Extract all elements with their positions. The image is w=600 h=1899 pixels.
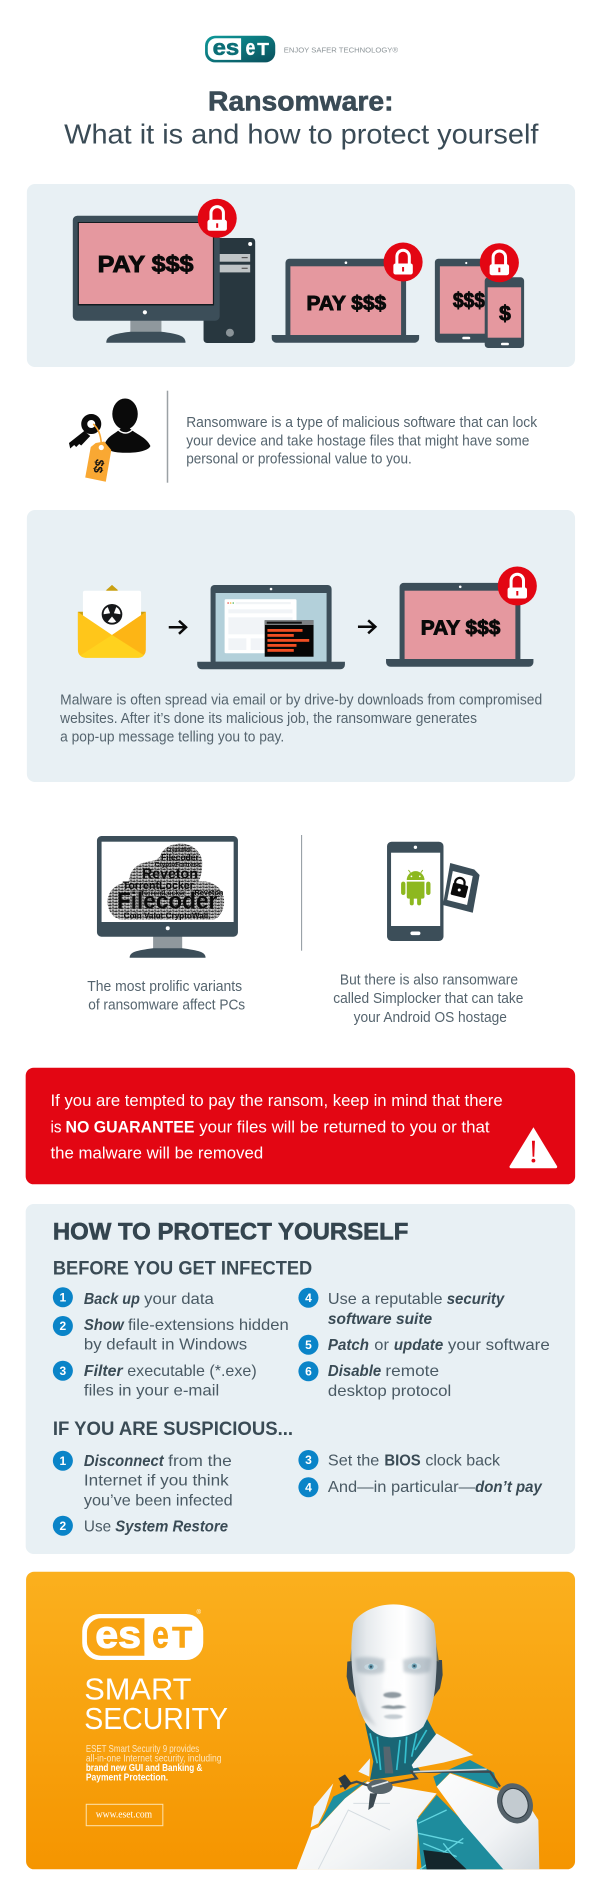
icon: desktop tower xyxy=(204,238,255,343)
suspicious step 4: 4 xyxy=(305,1481,312,1494)
ESET white logo: e xyxy=(152,1615,169,1657)
ESET white logo: T xyxy=(172,1622,193,1655)
panel: red warning callout xyxy=(26,1068,575,1184)
step 6: desktop protocol xyxy=(328,1382,451,1400)
panel: how to protect yourself xyxy=(26,1204,575,1554)
ESET white logo: es xyxy=(95,1615,141,1657)
panel: red warning callout: the malware will be removed xyxy=(51,1144,263,1163)
locked SD card xyxy=(443,863,480,913)
icon: warning triangle xyxy=(509,1127,557,1168)
panel: locked devices xyxy=(27,184,575,367)
icon: laptop with ransom screen: PAY $$$ xyxy=(421,618,500,640)
step 1: Back up xyxy=(84,1290,140,1308)
suspicious step 4: And—in particular— xyxy=(328,1478,476,1496)
caption: Simplocker xyxy=(333,973,523,1026)
divider xyxy=(167,391,168,483)
arrow xyxy=(169,621,186,634)
suspicious step 1 xyxy=(53,1451,233,1509)
step 2: by default in Windows xyxy=(84,1336,247,1354)
android logo xyxy=(401,870,430,905)
word cloud: CryptoFortress xyxy=(155,863,201,869)
ESET logo with tagline: ENJOY SAFER TECHNOLOGY® xyxy=(284,46,399,54)
heading: HOW TO PROTECT YOURSELF xyxy=(53,1218,408,1245)
step 5: 5 xyxy=(305,1338,312,1352)
price tag: $$ xyxy=(90,458,107,474)
divider xyxy=(301,835,302,951)
step 4: 4 xyxy=(305,1291,312,1305)
ESET logo with tagline: e xyxy=(246,35,255,60)
panel: ESET Smart Security promo xyxy=(26,1572,575,1869)
step 3: 3 xyxy=(60,1364,67,1378)
icon: laptop locked xyxy=(272,259,419,343)
suspicious step 3: Set the xyxy=(328,1451,379,1469)
step 4: Use a reputable xyxy=(328,1290,443,1308)
panel: red warning callout: is xyxy=(51,1117,62,1136)
text block: ransomware definition: Ransomware is a type of malicious software that can lock xyxy=(186,415,538,431)
ESET white logo: ® xyxy=(197,1609,202,1616)
text block: ransomware definition: your device and take hostage files that might have some xyxy=(186,433,529,449)
icon: desktop monitor locked: PAY $$$ xyxy=(98,251,194,277)
browser window xyxy=(225,599,296,653)
ESET logo with tagline: es xyxy=(213,35,239,60)
illustration: ESET android robot xyxy=(297,1604,539,1869)
caption: Simplocker: But there is also ransomware xyxy=(340,973,518,989)
suspicious step 3 xyxy=(298,1450,501,1470)
product name: SECURITY xyxy=(84,1701,228,1736)
neck xyxy=(365,1718,437,1780)
icon: monitor with word cloud xyxy=(97,836,238,958)
icon: tablet locked xyxy=(435,259,495,343)
word cloud: Reveton xyxy=(195,888,224,897)
terminal window xyxy=(265,620,314,657)
text block: ransomware definition xyxy=(186,415,538,468)
step 2 xyxy=(53,1316,289,1354)
step 1: your data xyxy=(144,1290,214,1308)
panel: red warning callout: your files will be returned to you or that xyxy=(199,1117,490,1136)
suspicious step 1: you’ve been infected xyxy=(84,1491,233,1509)
step 6: 6 xyxy=(305,1365,312,1378)
person xyxy=(104,398,150,453)
caption: PC variants xyxy=(87,979,245,1013)
step 5 xyxy=(298,1335,550,1355)
nose and lips xyxy=(381,1692,407,1719)
product description: ESET Smart Security 9 provides xyxy=(86,1744,199,1755)
suspicious step 3: BIOS xyxy=(384,1451,421,1469)
icon: red lock laptop xyxy=(384,242,423,282)
icon: red lock xyxy=(498,566,537,606)
text block: ransomware definition: personal or professional value to you. xyxy=(186,452,412,468)
title: Ransomware: xyxy=(208,86,394,117)
arrow xyxy=(358,620,375,633)
shoulder ring xyxy=(491,1777,539,1829)
step 2: 2 xyxy=(60,1319,67,1333)
suspicious step 3: clock back xyxy=(425,1451,501,1469)
caption: Simplocker: called Simplocker that can take xyxy=(333,991,523,1007)
product description: all-in-one Internet security, including xyxy=(86,1754,221,1765)
icon: laptop with browser and terminal xyxy=(197,585,345,669)
step 2: Show xyxy=(84,1316,125,1334)
text block: malware description: a pop-up message telling you to pay. xyxy=(60,729,284,745)
right shoulder armour xyxy=(437,1773,539,1869)
caption: PC variants: of ransomware affect PCs xyxy=(88,997,245,1013)
suspicious step 2: 2 xyxy=(60,1519,67,1533)
title: What it is and how to protect yourself xyxy=(64,118,539,149)
step 5: update xyxy=(394,1336,443,1354)
icon: tablet locked: $$$ xyxy=(453,289,485,312)
word cloud: TorrentLocker xyxy=(123,880,195,892)
word cloud: Reveton xyxy=(142,866,198,882)
suspicious step 4: don’t pay xyxy=(475,1478,543,1496)
suspicious step 4 xyxy=(298,1477,543,1497)
harness strap xyxy=(338,1769,500,1810)
text block: malware description: Malware is often spread via email or by drive-by downloads from compromised xyxy=(60,692,542,708)
product description: brand new GUI and Banking & xyxy=(86,1763,202,1774)
step 6: Disable xyxy=(328,1362,381,1380)
word cloud: Filecoder xyxy=(161,853,199,863)
step 3 xyxy=(53,1361,257,1400)
product description xyxy=(86,1744,221,1783)
step 2: file-extensions hidden xyxy=(128,1316,289,1334)
step 5: or xyxy=(374,1336,390,1354)
step 1: 1 xyxy=(60,1291,67,1304)
text block: malware description: websites. After it’s done its malicious job, the ransomware generates xyxy=(59,711,477,727)
ears and back of head xyxy=(347,1630,443,1697)
subheading: before infected: BEFORE YOU GET INFECTED xyxy=(53,1258,312,1280)
suspicious step 2: Use xyxy=(84,1518,111,1536)
word cloud: CryptoWall xyxy=(166,848,192,854)
ESET logo with tagline: T xyxy=(257,39,269,59)
teal chest circuitry xyxy=(417,1760,505,1869)
icon: phone locked: $ xyxy=(499,303,511,326)
body xyxy=(297,1758,437,1869)
icon: envelope with radiation symbol xyxy=(78,585,146,658)
caption: Simplocker: your Android OS hostage xyxy=(354,1010,507,1026)
step 4: security xyxy=(447,1290,505,1308)
icon: android phone with locked SD card xyxy=(387,842,480,941)
icon: laptop locked: PAY $$$ xyxy=(307,293,386,315)
step 3: Filter xyxy=(84,1362,123,1380)
step 3: executable (*.exe) xyxy=(127,1362,257,1380)
icon: laptop with ransom screen xyxy=(386,583,533,667)
panel: how malware spreads xyxy=(27,510,575,782)
step 5: Patch xyxy=(328,1336,369,1354)
product description: Payment Protection. xyxy=(86,1772,168,1783)
step 1 xyxy=(53,1287,214,1308)
step 4 xyxy=(298,1288,505,1328)
suspicious step 2 xyxy=(53,1516,228,1536)
panel: red warning callout: If you are tempted to pay the ransom, keep in mind that there xyxy=(51,1091,503,1110)
key xyxy=(69,417,98,448)
eyes xyxy=(364,1663,421,1670)
step 3: files in your e-mail xyxy=(84,1382,219,1400)
icon: desktop monitor locked xyxy=(73,216,220,343)
panel: red warning callout: NO GUARANTEE xyxy=(65,1117,195,1136)
step 6: remote xyxy=(385,1362,439,1380)
head xyxy=(351,1604,437,1737)
suspicious step 1: Disconnect xyxy=(84,1452,164,1470)
product name: SMART xyxy=(84,1671,192,1706)
title xyxy=(64,86,539,149)
word cloud: Coin Valut CryptoWall. xyxy=(124,910,211,920)
word cloud xyxy=(108,844,224,920)
ESET white logo xyxy=(82,1609,203,1660)
icon: person with key and price tag xyxy=(69,398,150,482)
suspicious step 1: from the xyxy=(168,1452,232,1470)
radiation symbol xyxy=(102,604,122,625)
suspicious step 1: Internet if you think xyxy=(84,1472,230,1490)
caption: PC variants: The most prolific variants xyxy=(87,979,242,995)
suspicious step 2: System Restore xyxy=(115,1518,228,1536)
url button: www.eset.com xyxy=(96,1810,152,1821)
step 5: your software xyxy=(448,1336,550,1354)
face shading xyxy=(355,1657,432,1727)
step 6 xyxy=(298,1361,451,1400)
ESET logo with tagline xyxy=(205,35,399,62)
icon: red lock mobile xyxy=(480,243,519,282)
suspicious step 1: 1 xyxy=(60,1454,67,1468)
suspicious step 3: 3 xyxy=(305,1453,312,1467)
subheading: if suspicious: IF YOU ARE SUSPICIOUS... xyxy=(53,1418,293,1440)
product name xyxy=(84,1671,228,1736)
word cloud: TorrentLocker xyxy=(140,890,186,897)
icon: phone locked xyxy=(485,277,524,348)
icon: red lock desktop xyxy=(198,199,237,238)
word cloud: Filecoder xyxy=(117,887,217,913)
step 4: software suite xyxy=(328,1310,432,1328)
url button xyxy=(86,1804,163,1826)
collar xyxy=(412,1733,473,1768)
text block: malware description xyxy=(59,692,542,745)
